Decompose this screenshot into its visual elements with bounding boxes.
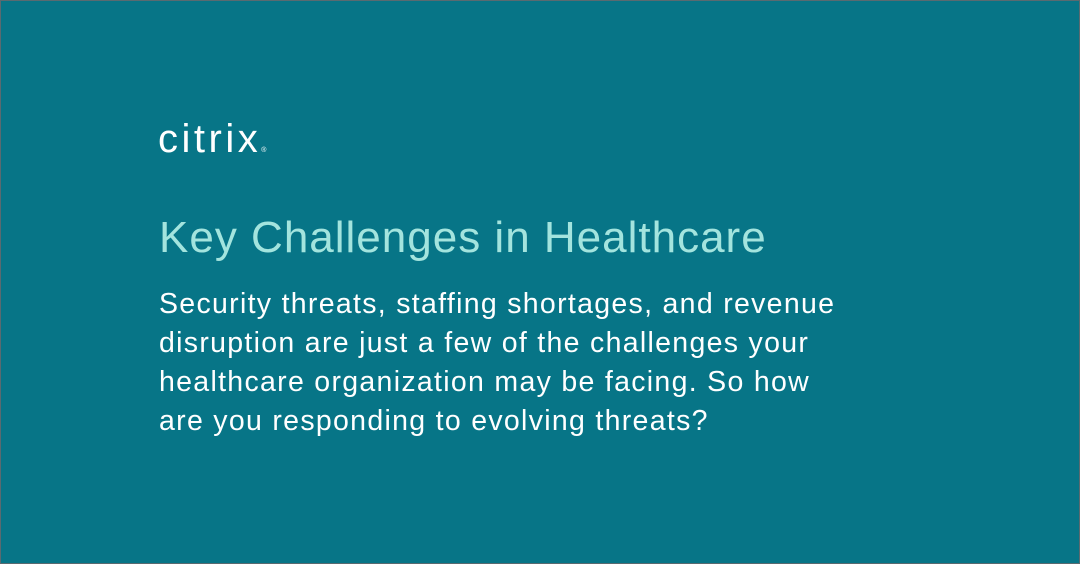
title: Key Challenges in Healthcare	[159, 213, 767, 262]
body text: Security threats, staffing shortages, and revenue	[159, 288, 835, 320]
body text	[159, 288, 835, 437]
logo: citrix: citrix®	[158, 117, 266, 161]
body text: are you responding to evolving threats?	[159, 405, 709, 437]
body text: healthcare organization may be facing. So how	[159, 366, 810, 398]
body text: disruption are just a few of the challenges your	[159, 327, 809, 359]
